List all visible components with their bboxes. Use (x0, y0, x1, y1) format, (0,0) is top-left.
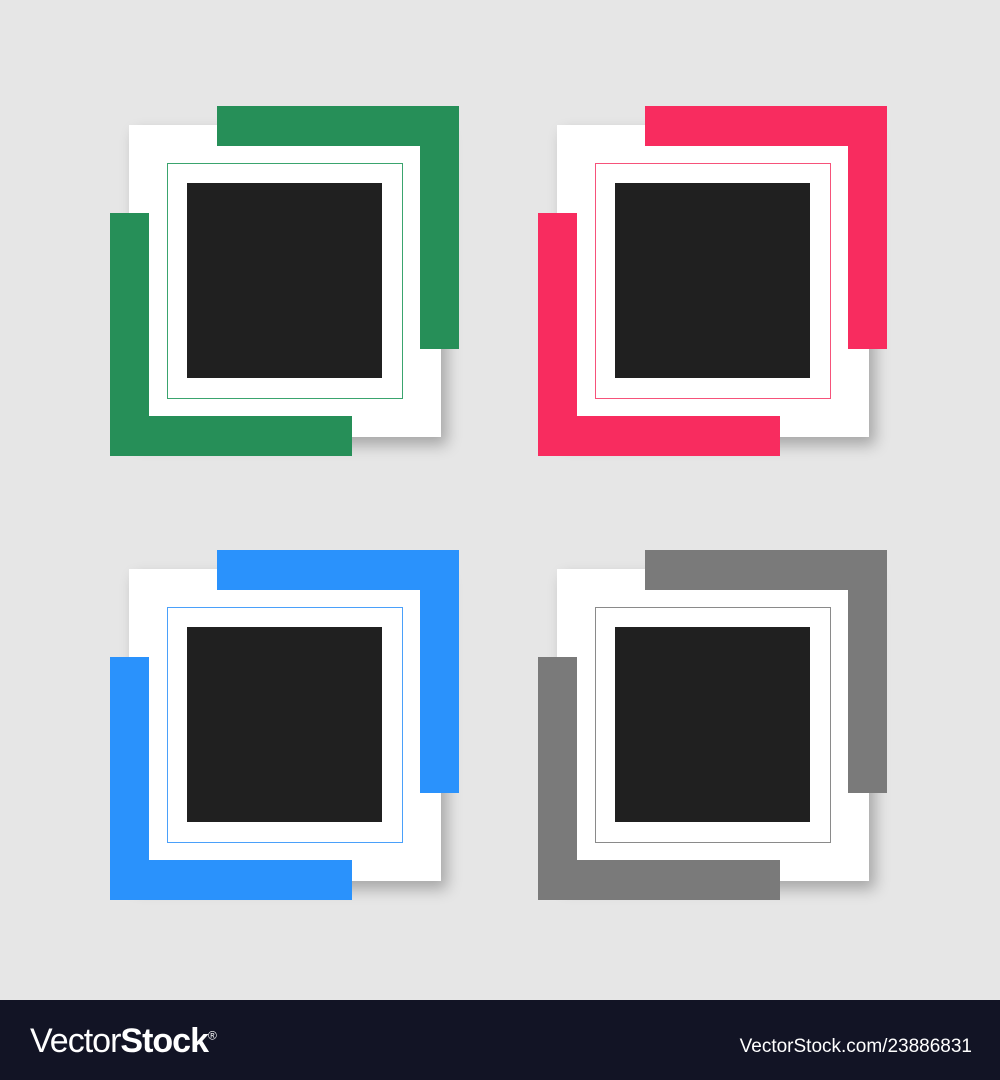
frame: blue (110, 550, 459, 900)
corner right (848, 106, 887, 349)
white card (129, 125, 441, 437)
corner left (110, 657, 149, 900)
corner left (110, 213, 149, 456)
white card (557, 569, 869, 881)
photo placeholder (615, 183, 810, 378)
corner right (420, 550, 459, 793)
frame: green (110, 106, 459, 456)
white card (557, 125, 869, 437)
corner top-right (217, 550, 459, 590)
frame: pink (538, 106, 887, 456)
footer bar (0, 1000, 1000, 1080)
corner top-right (217, 106, 459, 146)
photo placeholder (615, 627, 810, 822)
corner bottom (538, 860, 780, 900)
corner right (420, 106, 459, 349)
photo placeholder (187, 627, 382, 822)
corner bottom (110, 860, 352, 900)
inner outline (167, 163, 403, 399)
corner left (538, 657, 577, 900)
logo: VectorStock® (30, 1022, 216, 1060)
inner outline (595, 607, 831, 843)
photo placeholder (187, 183, 382, 378)
image id: VectorStock.com/23886831 (740, 1036, 972, 1057)
corner top-right (645, 106, 887, 146)
corner right (848, 550, 887, 793)
frame: gray (538, 550, 887, 900)
corner top-right (645, 550, 887, 590)
corner bottom (538, 416, 780, 456)
inner outline (167, 607, 403, 843)
white card (129, 569, 441, 881)
corner left (538, 213, 577, 456)
corner bottom (110, 416, 352, 456)
inner outline (595, 163, 831, 399)
